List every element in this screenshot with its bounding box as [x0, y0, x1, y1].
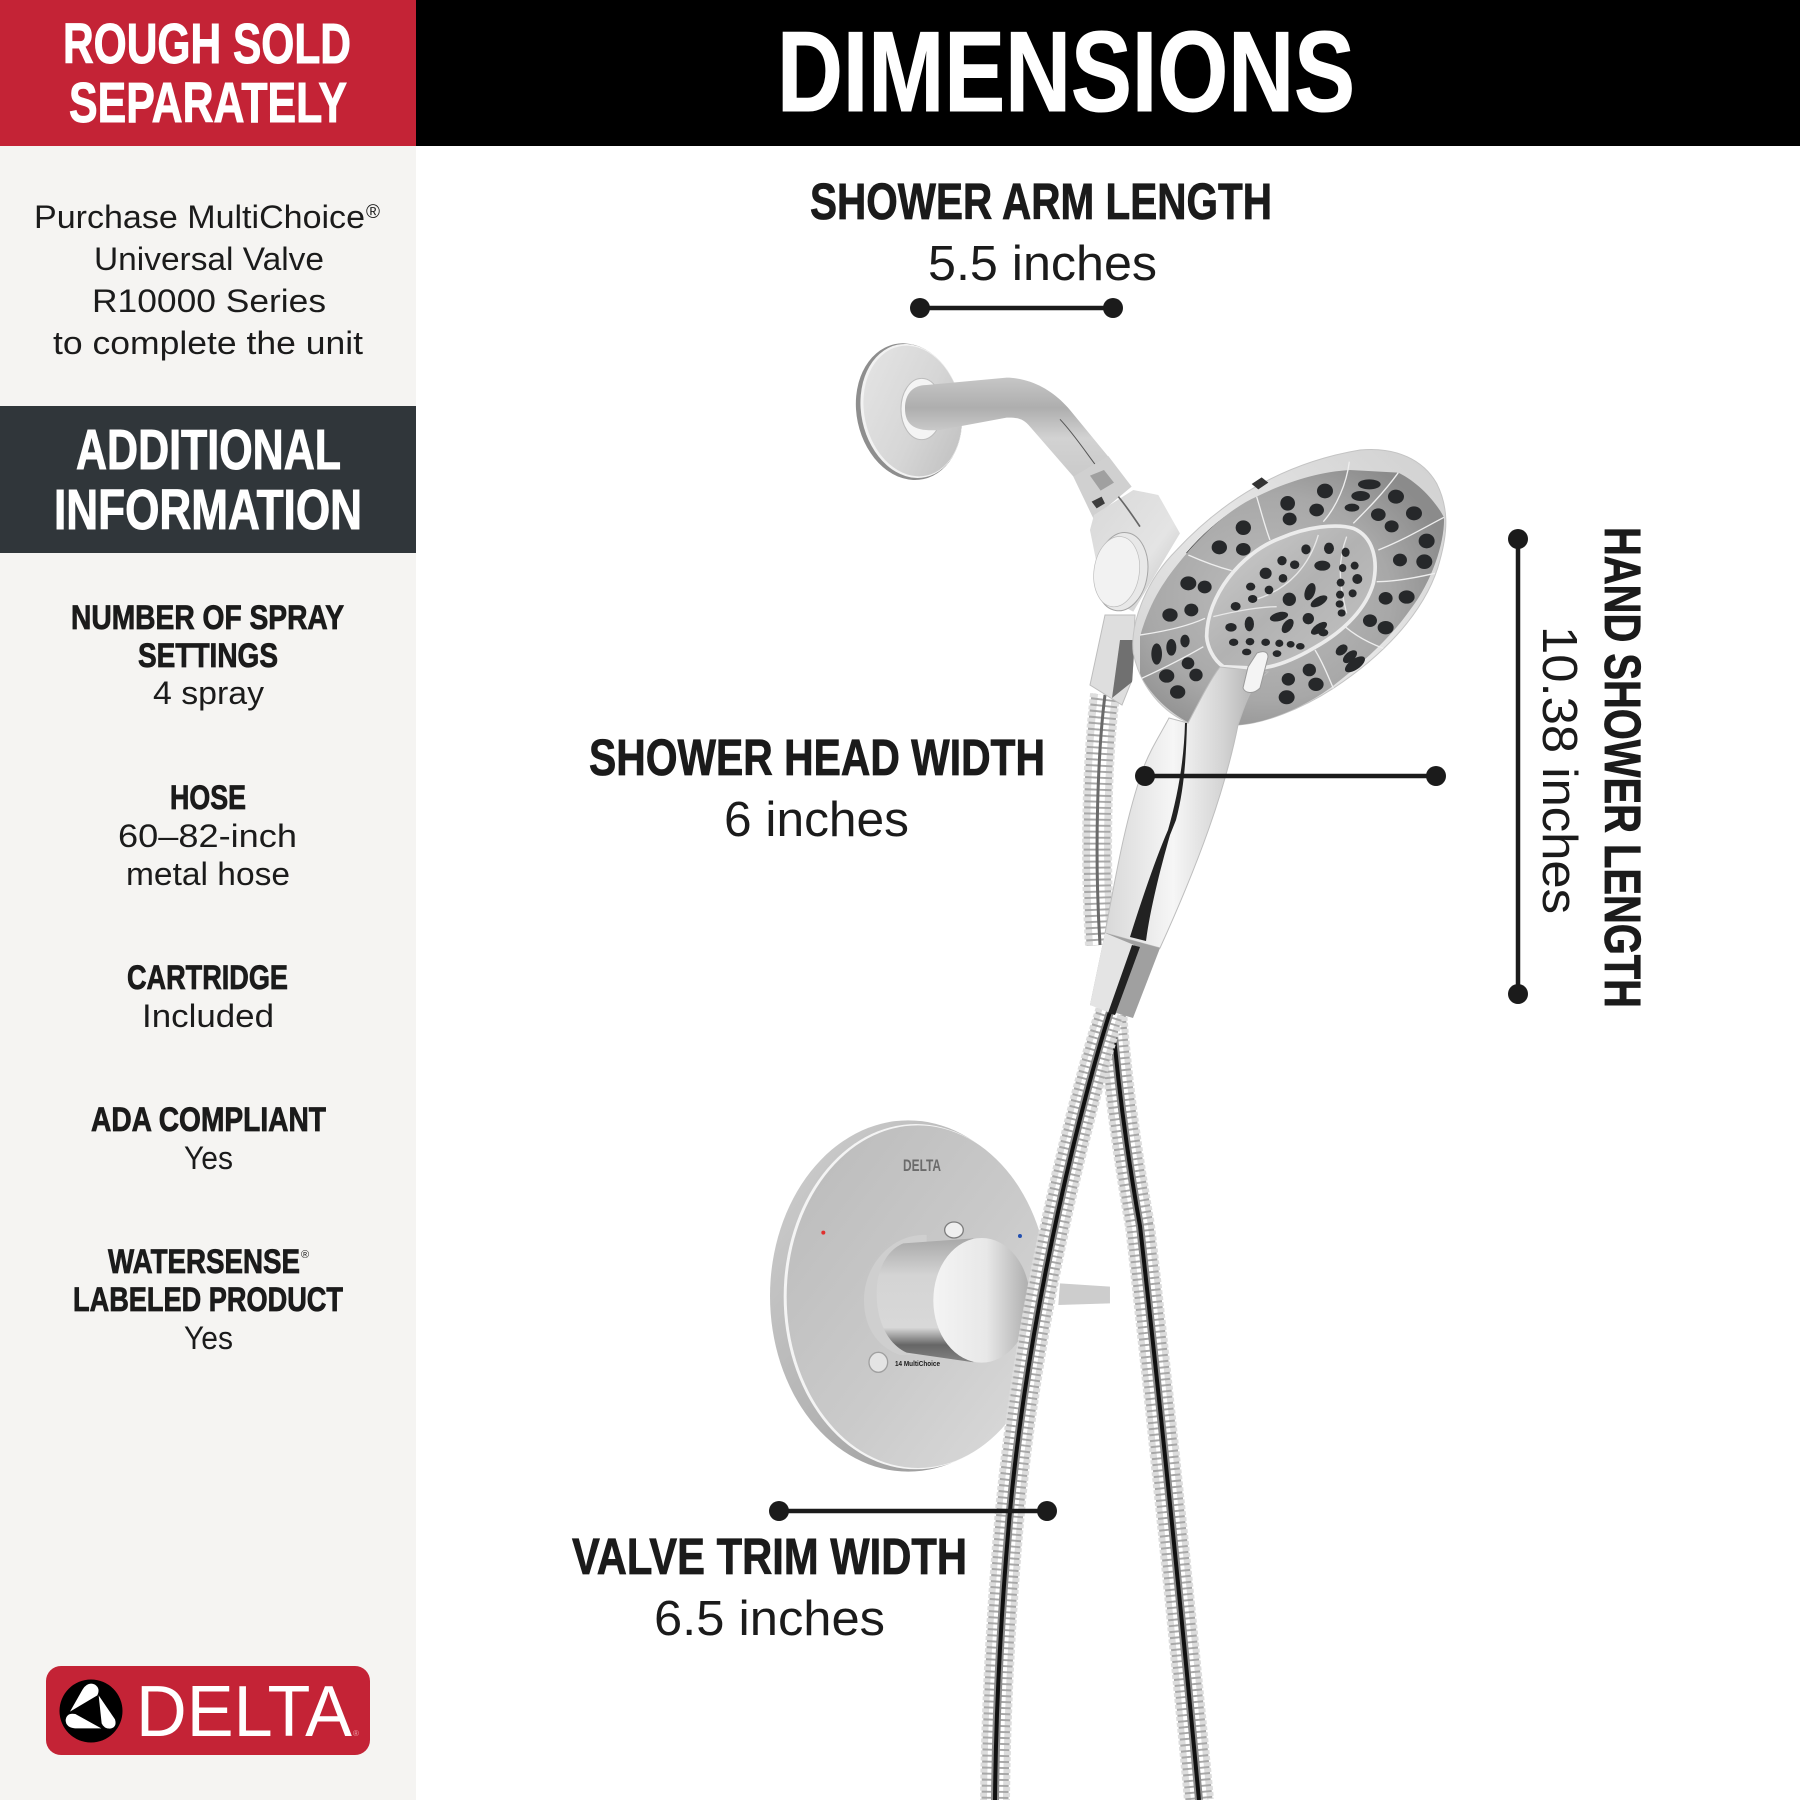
text block: purchase valve note: Purchase MultiChoice: [34, 199, 365, 235]
label: shower head width: [589, 729, 1045, 847]
rim: [1133, 449, 1446, 725]
handle ferrule: [1090, 933, 1160, 1018]
spec: cartridge: [127, 959, 288, 1034]
text block: purchase valve note: ®: [366, 202, 380, 223]
swivel bracket: [1090, 490, 1180, 612]
spec: number of spray settings: 4 spray: [153, 675, 264, 711]
title: dimensions: [416, 0, 1800, 146]
spec: number of spray settings: SETTINGS: [138, 637, 278, 675]
spec: hose: 60–82-inch: [118, 818, 297, 854]
spec: cartridge: Included: [142, 998, 274, 1034]
illustration: valve trim plate: [770, 1120, 1110, 1472]
spec: hose: [118, 779, 297, 892]
text block: purchase valve note: [34, 199, 380, 361]
illustration: hose holder: [1090, 615, 1135, 705]
shower arm: [905, 378, 1108, 478]
label: shower arm length: [810, 173, 1272, 291]
banner: rough sold separately: ROUGH SOLD: [63, 12, 351, 76]
label: shower arm length: 5.5 inches: [928, 237, 1157, 291]
flange: [843, 333, 975, 490]
inner spray ring: [1207, 526, 1375, 668]
text block: purchase valve note: Universal Valve: [94, 241, 324, 277]
spec: hose: metal hose: [126, 856, 290, 892]
dimension line: hand shower: [1508, 529, 1528, 1004]
inner spray holes: [1225, 543, 1362, 657]
logo: delta: [46, 1666, 370, 1755]
collar and nut: [1073, 456, 1132, 518]
spec: number of spray settings: NUMBER OF SPRAY: [71, 599, 344, 637]
illustration: hoses: [995, 695, 1199, 1800]
label: shower head width: SHOWER HEAD WIDTH: [589, 729, 1045, 786]
label: valve trim width: VALVE TRIM WIDTH: [572, 1528, 967, 1585]
outer spray holes: [1151, 479, 1435, 704]
label: hand shower length: [1532, 527, 1651, 1008]
spec: watersense labeled product: Yes: [184, 1320, 233, 1356]
dimension line: shower head: [1135, 766, 1446, 786]
label: hand shower length: HAND SHOWER LENGTH: [1594, 527, 1651, 1008]
label: shower arm length: SHOWER ARM LENGTH: [810, 173, 1272, 230]
label: valve trim width: 6.5 inches: [654, 1592, 885, 1646]
spec: hose: HOSE: [170, 779, 246, 817]
spec: ada compliant: Yes: [184, 1140, 233, 1176]
banner: rough sold separately: [0, 0, 416, 146]
title: dimensions: DIMENSIONS: [777, 9, 1355, 136]
heading: additional information: [0, 406, 416, 553]
spec: watersense labeled product: LABELED PRODUCT: [73, 1281, 343, 1319]
label: valve trim width: [572, 1528, 967, 1646]
spec: number of spray settings: [71, 599, 344, 711]
dimension line: valve trim: [769, 1501, 1057, 1521]
dimension line: shower arm: [910, 298, 1123, 318]
spec: watersense labeled product: ®: [301, 1249, 309, 1261]
illustration: hand shower handle: [1090, 652, 1268, 1018]
logo: delta: DELTA: [136, 1672, 352, 1752]
spec: ada compliant: ADA COMPLIANT: [91, 1101, 326, 1139]
logo: delta: ®: [353, 1729, 359, 1738]
text block: purchase valve note: to complete the unit: [53, 325, 363, 361]
text block: purchase valve note: R10000 Series: [92, 283, 326, 319]
illustration: valve trim plate: 14 MultiChoice: [895, 1359, 940, 1368]
heading: additional information: INFORMATION: [54, 478, 362, 542]
heading: additional information: ADDITIONAL: [76, 418, 341, 482]
spec: watersense labeled product: [73, 1243, 343, 1356]
spray lever: [1243, 652, 1268, 693]
spray face: [1140, 470, 1444, 725]
illustration: shower head: [1133, 449, 1446, 725]
spec: cartridge: CARTRIDGE: [127, 959, 288, 997]
segment dividers: [1140, 462, 1444, 688]
label: hand shower length: 10.38 inches: [1532, 626, 1586, 914]
illustration: shower arm and mount: [843, 333, 1180, 614]
panel: left sidebar: [0, 0, 416, 1800]
spec: ada compliant: [91, 1101, 326, 1176]
label: shower head width: 6 inches: [724, 793, 909, 847]
spec: watersense labeled product: WATERSENSE: [108, 1243, 300, 1281]
banner: rough sold separately: SEPARATELY: [69, 71, 347, 135]
illustration: valve trim plate: DELTA: [903, 1156, 941, 1175]
swivel knob: [1089, 529, 1153, 614]
